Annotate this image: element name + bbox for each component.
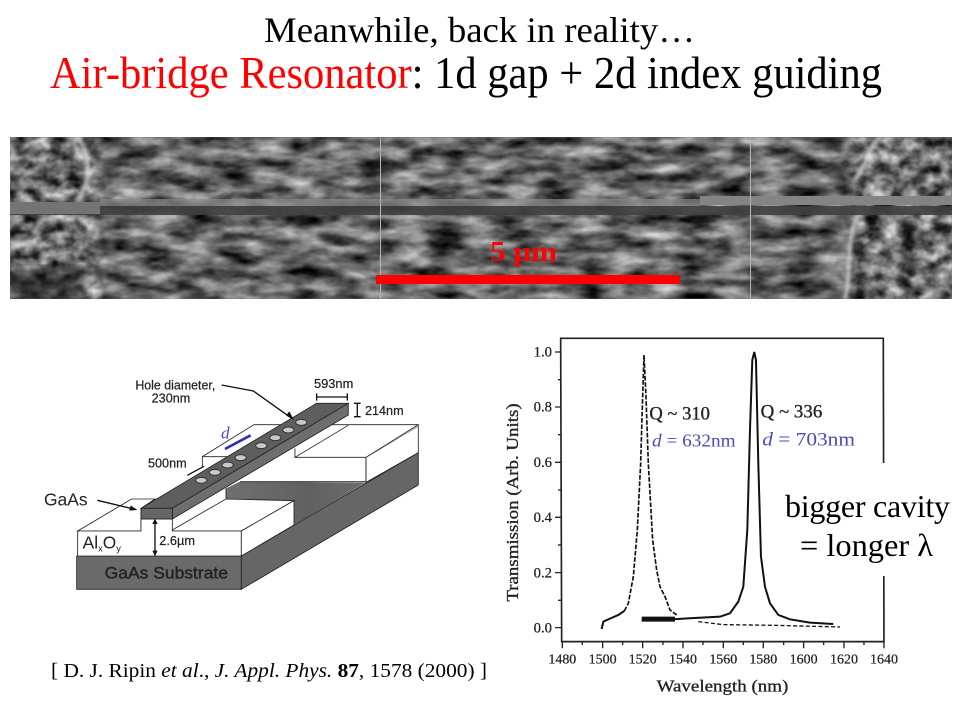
scale label: 5 µm: 5 µm [490,236,557,268]
axis ticks [555,352,884,648]
label hole diameter: 500nm [148,457,187,471]
x axis title: Wavelength (nm) [657,677,789,696]
label hole diameter [135,377,404,548]
label GaAs Substrate: GaAs Substrate [105,563,228,582]
label AlxOy: Al [83,533,98,553]
label d: d [221,424,230,443]
x tick labels: 1540 [669,653,697,668]
oxide layer [78,425,418,556]
x tick labels: 1600 [790,653,818,668]
y tick labels [534,345,553,636]
holes [196,419,307,483]
title: Meanwhile, back in reality: Meanwhile, back in reality… [264,10,695,50]
substrate [77,453,418,589]
x tick labels: 1560 [709,653,737,668]
citation: [ D. J. Ripin et al., J. Appl. Phys. 87, 1578 (2000) ] [51,660,487,682]
y tick labels: 0.2 [534,565,552,581]
solid curve, d = 703nm [673,352,833,624]
callout: bigger cavity = longer lambda [780,463,955,576]
label hole diameter: Hole diameter, [135,378,215,392]
x tick labels: 1640 [870,653,898,668]
callout: bigger cavity = longer lambda: bigger cavity [785,488,950,524]
y axis title: Transmission (Arb. Units) [503,403,522,602]
label Q 336: Q ~ 336 [761,402,822,423]
y tick labels: 0.4 [534,510,553,526]
label hole diameter: 214nm [365,404,404,418]
label AlxOy: x [98,543,103,553]
heading: Air-bridge Resonator: Air-bridge Resonator: 1d gap + 2d index guiding [50,47,882,98]
y tick labels: 0.8 [534,400,552,416]
label AlxOy: y [116,543,121,553]
y tick labels: 0.0 [534,620,552,636]
callout: bigger cavity = longer lambda: = longer λ [800,527,933,563]
chart: transmission vs wavelength [503,338,898,696]
y tick labels: 1.0 [534,345,552,361]
label GaAs: GaAs [44,489,88,509]
dashed curve, d = 632nm [602,355,840,629]
blue d marker [225,435,251,449]
scale bar [376,275,680,284]
y tick labels: 0.6 [534,455,552,471]
x tick labels: 1620 [830,653,858,668]
label Q 310: Q ~ 310 [649,403,710,424]
panel: SEM micrograph of the air-bridge [10,137,952,308]
label d 632nm: d = 632nm [652,431,736,451]
x tick labels [548,653,898,668]
x tick labels: 1480 [548,653,576,668]
thick noisy start of solid curve [642,617,675,622]
x tick labels: 1500 [589,653,617,668]
label hole diameter: 230nm [152,391,190,405]
arrowheads [129,411,294,556]
schematic: air-bridge structure [44,377,418,589]
x tick labels: 1580 [749,653,777,668]
x tick labels: 1520 [629,653,657,668]
bridge [141,403,348,519]
label AlxOy: O [103,533,116,553]
label hole diameter: 593nm [314,377,353,391]
label d 703nm: d = 703nm [762,430,855,451]
label hole diameter: 2.6µm [159,534,195,548]
plot frame [561,338,884,642]
dimension arrows [97,385,361,555]
